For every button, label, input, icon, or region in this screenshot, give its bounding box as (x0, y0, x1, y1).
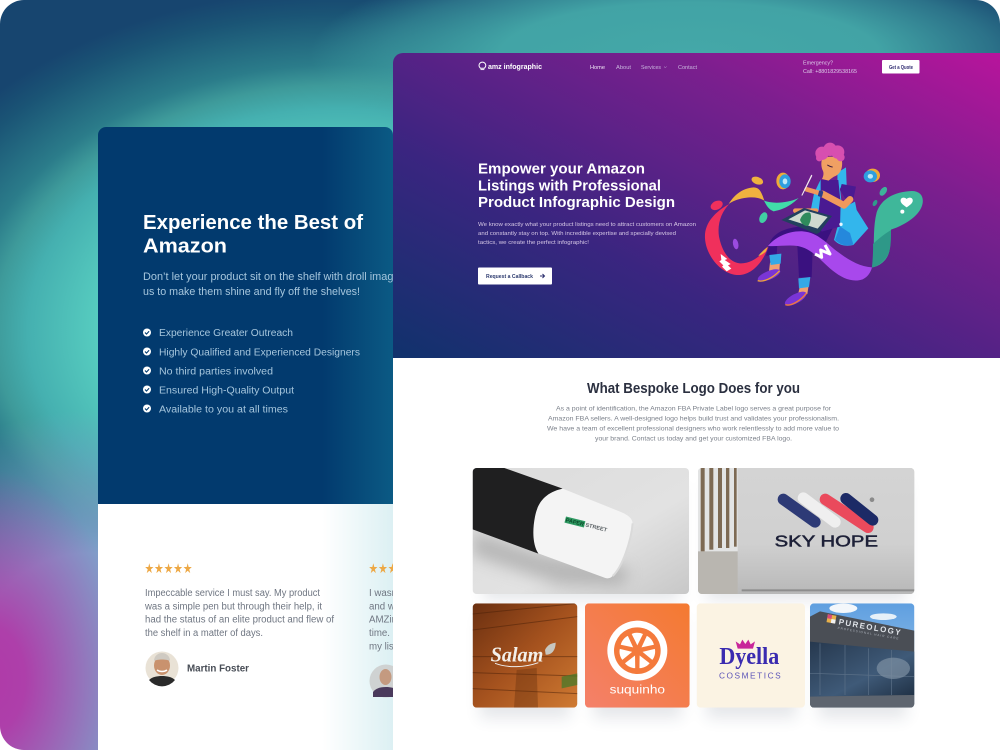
tile: Dyella Cosmetics (697, 603, 805, 708)
hero paragraph (478, 222, 696, 246)
Dyella wordmark: Dyella (719, 644, 779, 670)
testimonial 2 (cropped) (369, 563, 393, 698)
Salam lettering: Salam (491, 642, 543, 666)
shoes (756, 267, 782, 284)
hero heading: Product Infographic Design (478, 195, 675, 211)
hero heading (478, 162, 675, 211)
ankles (769, 262, 809, 297)
checklist item 1: Experience Greater Outreach (159, 328, 293, 339)
checklist item 3: No third parties involved (159, 366, 273, 378)
tile: Salam wood sign (473, 603, 577, 708)
tile: Sky Hope sign (698, 468, 914, 594)
menu links: About (616, 65, 632, 71)
section paragraph: your brand. Contact us today and get your customized FBA logo. (595, 436, 792, 442)
testimonial 2 quote (369, 589, 393, 652)
white testimonial block (98, 504, 393, 750)
Suquinho wordmark: suquinho (610, 683, 665, 697)
avatar: Martin Foster (146, 652, 178, 686)
gallery shadows (480, 483, 907, 718)
cuffs (769, 254, 781, 265)
star rating 1: ★★★★★ (144, 561, 192, 576)
quote button (882, 60, 920, 74)
Paper Street label: PAPER (565, 518, 585, 528)
tile: Dyella Cosmetics: COSMETICS (719, 670, 781, 680)
menu links: Contact (678, 65, 698, 71)
callback button (478, 268, 552, 284)
crown (736, 640, 755, 649)
logo: amz infographic (488, 64, 542, 71)
avatar: second customer (370, 664, 393, 698)
testimonial 2 quote: time. (369, 628, 390, 639)
vest highlights (839, 223, 843, 226)
illustration: designer on colorful ribbon (705, 143, 923, 308)
checklist item 4: Ensured High-Quality Output (159, 386, 294, 396)
testimonial 2 quote: and we (369, 602, 400, 612)
checklist (143, 328, 360, 416)
checklist item 5: Available to you at all times (159, 404, 288, 416)
emergency phone: Emergency? (803, 60, 833, 66)
logo gallery (473, 468, 914, 718)
arms (795, 189, 850, 211)
Pureology sign: PROFESSIONAL HAIR CARE (837, 626, 899, 641)
section paragraph: As a point of identification, the Amazon FBA Private Label logo serves a great purpose for (556, 406, 832, 412)
Pureology sign: PUREOLOGY (838, 617, 902, 637)
panel: product infographic page (front page) (393, 53, 1000, 750)
Sky Hope logo mark (783, 498, 873, 527)
ribbon: mint (764, 198, 799, 211)
logo (479, 62, 542, 71)
white heart (901, 198, 913, 207)
Pureology sign (826, 614, 902, 641)
white page body (393, 330, 1000, 750)
ribbon: green (872, 191, 923, 267)
menu links: Services (641, 65, 661, 71)
left heading: Experience the Best of (143, 211, 363, 234)
section heading: What Bespoke Logo Does for you (587, 381, 800, 397)
left heading: Amazon (143, 234, 227, 258)
testimonial 2 quote: I wasn’t (369, 588, 402, 599)
hero heading: Listings with Professional (478, 178, 661, 194)
ribbon: yellow (729, 187, 764, 204)
testimonial 1 quote: was a simple pen but through their help, it (144, 602, 322, 612)
Sky Hope wordmark: SKY HOPE (775, 533, 878, 550)
ribbon: purple (768, 231, 872, 281)
vest right panel (834, 167, 868, 246)
shirt (815, 180, 841, 232)
section paragraph: Amazon FBA sellers. A well-designed logo helps build trust and validates your professionalism. (548, 416, 839, 422)
stylus (801, 175, 812, 196)
hero gradient (393, 53, 1000, 358)
tile: Paper Street roll (473, 468, 689, 594)
emergency phone: Call: +8801829538165 (803, 69, 857, 75)
checklist item 2: Highly Qualified and Experienced Designers (159, 348, 360, 358)
testimonial 1 (144, 561, 334, 686)
sleeve (840, 184, 856, 199)
section paragraph (547, 406, 839, 442)
hero paragraph: and constantly stay on top. With incredible expertise and specially devised (478, 231, 676, 237)
head (821, 157, 842, 181)
menu links: Home (590, 65, 605, 71)
star rating 2: ★★★★★ (368, 561, 416, 576)
Paper Street label (564, 516, 608, 532)
section paragraph: We have a team of excellent professional designers who work relentlessly to add more value to (547, 426, 839, 432)
left heading (144, 214, 364, 252)
ribbon: red (705, 204, 768, 275)
testimonial 2 quote: my list (369, 642, 397, 652)
orange slice emblem (614, 627, 661, 674)
menu links (590, 65, 698, 71)
testimonial 1 quote: Impeccable service I must say. My product (145, 588, 320, 599)
tablet (781, 208, 832, 234)
hero heading: Empower your Amazon (478, 162, 645, 178)
name: Martin Foster: Martin Foster (187, 664, 249, 674)
Paper Street label: STREET (585, 523, 608, 534)
testimonial 1 quote: had the status of an elite product and flew of (145, 614, 334, 626)
emergency phone (803, 60, 857, 75)
testimonial 1 quote (144, 588, 334, 639)
hero paragraph: We know exactly what your product listings need to attract customers on Amazon (478, 222, 696, 228)
tile: Pureology building (810, 603, 914, 708)
testimonial 1 quote: the shelf in a matter of days. (145, 628, 263, 639)
callback button: Request a Callback (486, 274, 534, 280)
hair (815, 143, 845, 161)
paint blobs (709, 175, 889, 250)
vest left strip (811, 179, 821, 211)
navy hero block (98, 127, 393, 504)
panel: experience the best of Amazon (back page) (98, 127, 416, 750)
quote button: Get a Quote (889, 65, 913, 71)
legs (766, 227, 833, 277)
left intro paragraph (144, 272, 393, 298)
floating eye rings (776, 169, 880, 189)
testimonial 2 quote: AMZinf (369, 614, 400, 626)
hero paragraph: tactics, we create the perfect infographic! (478, 240, 589, 246)
left intro paragraph: us to make them shine and fly off the shelves! (143, 286, 360, 298)
left intro paragraph: Don’t let your product sit on the shelf with droll images (143, 271, 405, 283)
nav bar (479, 60, 920, 75)
tile: Suquinho logo (585, 603, 690, 708)
